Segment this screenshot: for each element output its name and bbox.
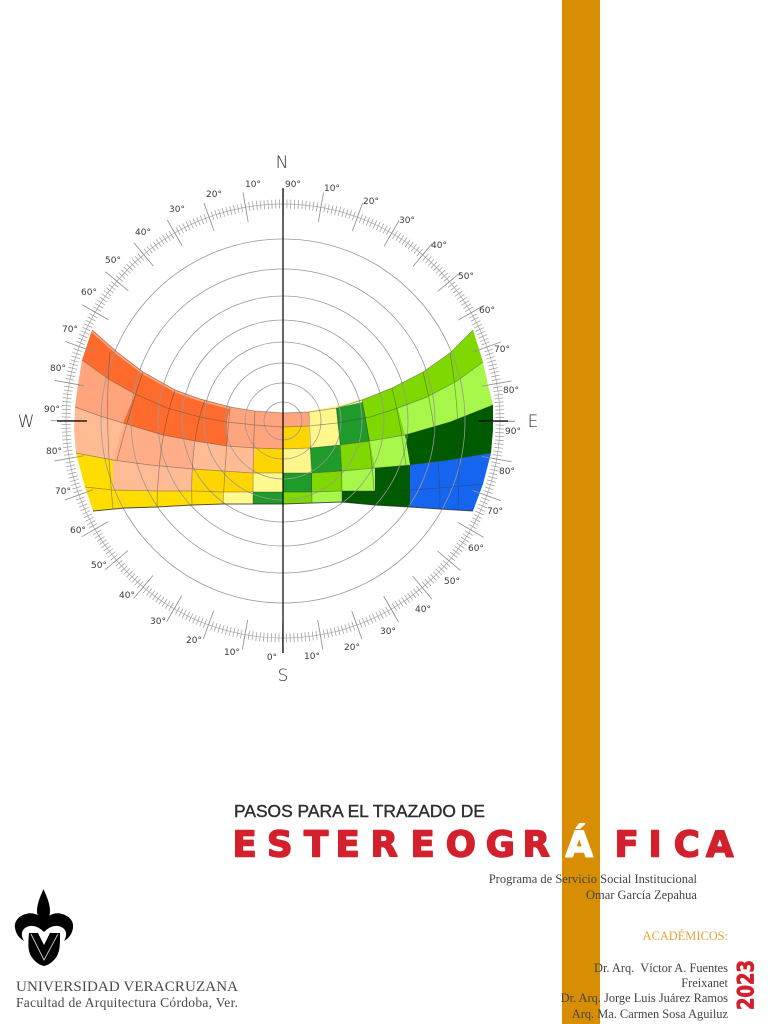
degree labels: 20° bbox=[344, 643, 360, 653]
bottom edge of sun path area bbox=[93, 502, 473, 511]
degree labels: 0° bbox=[267, 653, 277, 663]
degree labels: 40° bbox=[119, 591, 135, 601]
degree labels: 90° bbox=[44, 405, 60, 415]
degree labels: 80° bbox=[50, 364, 66, 374]
degree labels: 80° bbox=[499, 467, 515, 477]
degree labels: 10° bbox=[224, 648, 240, 658]
vertical orange band bbox=[562, 0, 600, 1024]
degree labels: 20° bbox=[186, 636, 202, 646]
degree labels: 70° bbox=[55, 487, 71, 497]
degree labels: 30° bbox=[169, 205, 185, 215]
degree labels: 60° bbox=[479, 306, 495, 316]
altitude circles bbox=[101, 239, 465, 603]
degree labels: 80° bbox=[503, 386, 519, 396]
cardinal letters bbox=[18, 153, 538, 686]
academics list: Arq. Ma. Carmen Sosa Aguiluz bbox=[572, 1007, 728, 1021]
degree labels: 50° bbox=[458, 272, 474, 282]
degree labels: 30° bbox=[399, 216, 415, 226]
degree labels: 80° bbox=[46, 447, 62, 457]
compass axes bbox=[57, 188, 508, 653]
academics list: ACADÉMICOS: bbox=[643, 929, 728, 943]
degree labels: 10° bbox=[245, 180, 261, 190]
university name: UNIVERSIDAD VERACRUZANA bbox=[16, 979, 238, 995]
academics list: Freixanet bbox=[681, 976, 729, 990]
outer graduated ring bbox=[66, 204, 500, 638]
title: estereografica: ESTEREOGRÁ FICA bbox=[0, 824, 734, 866]
sun path diagram bbox=[18, 153, 538, 686]
degree labels: 50° bbox=[105, 256, 121, 266]
icon: university fleur-de-lis logo bbox=[15, 889, 73, 966]
academics list: Dr. Arq. Víctor A. Fuentes bbox=[594, 961, 728, 975]
degree labels: 10° bbox=[324, 184, 340, 194]
degree labels: 50° bbox=[444, 577, 460, 587]
academics list bbox=[561, 929, 729, 1021]
degree labels: 20° bbox=[363, 197, 379, 207]
cardinal letters: W bbox=[18, 412, 34, 432]
degree labels: 30° bbox=[380, 627, 396, 637]
degree labels: 20° bbox=[206, 190, 222, 200]
degree labels: 70° bbox=[494, 345, 510, 355]
degree labels: 40° bbox=[135, 228, 151, 238]
degree labels: 40° bbox=[431, 241, 447, 251]
degree labels: 10° bbox=[304, 652, 320, 662]
program and author bbox=[489, 872, 698, 902]
degree labels: 40° bbox=[415, 605, 431, 615]
declination and hour lines bbox=[75, 330, 493, 509]
degree labels: 70° bbox=[62, 325, 78, 335]
degree labels: 90° bbox=[505, 427, 521, 437]
heading: pasos para el trazado de: PASOS PARA EL TRAZADO DE bbox=[234, 801, 485, 821]
cardinal letters: E bbox=[528, 412, 538, 432]
degree labels: 60° bbox=[70, 526, 86, 536]
degree labels: 60° bbox=[468, 544, 484, 554]
cardinal letters: S bbox=[278, 666, 288, 686]
title: estereografica: Á bbox=[566, 824, 594, 866]
program and author: Omar García Zepahua bbox=[586, 888, 697, 902]
cardinal letters: N bbox=[276, 153, 288, 173]
year 2023: 2023 bbox=[734, 960, 760, 1010]
colored sun path cells bbox=[74, 330, 493, 511]
faculty name: Facultad de Arquitectura Córdoba, Ver. bbox=[16, 995, 238, 1010]
degree labels: 90° bbox=[285, 180, 301, 190]
degree labels: 50° bbox=[91, 561, 107, 571]
degree labels bbox=[44, 180, 521, 663]
program and author: Programa de Servicio Social Institucional bbox=[489, 872, 698, 886]
degree labels: 30° bbox=[150, 617, 166, 627]
degree labels: 60° bbox=[81, 288, 97, 298]
degree labels: 70° bbox=[487, 507, 503, 517]
academics list: Dr. Arq. Jorge Luis Juárez Ramos bbox=[561, 991, 728, 1005]
